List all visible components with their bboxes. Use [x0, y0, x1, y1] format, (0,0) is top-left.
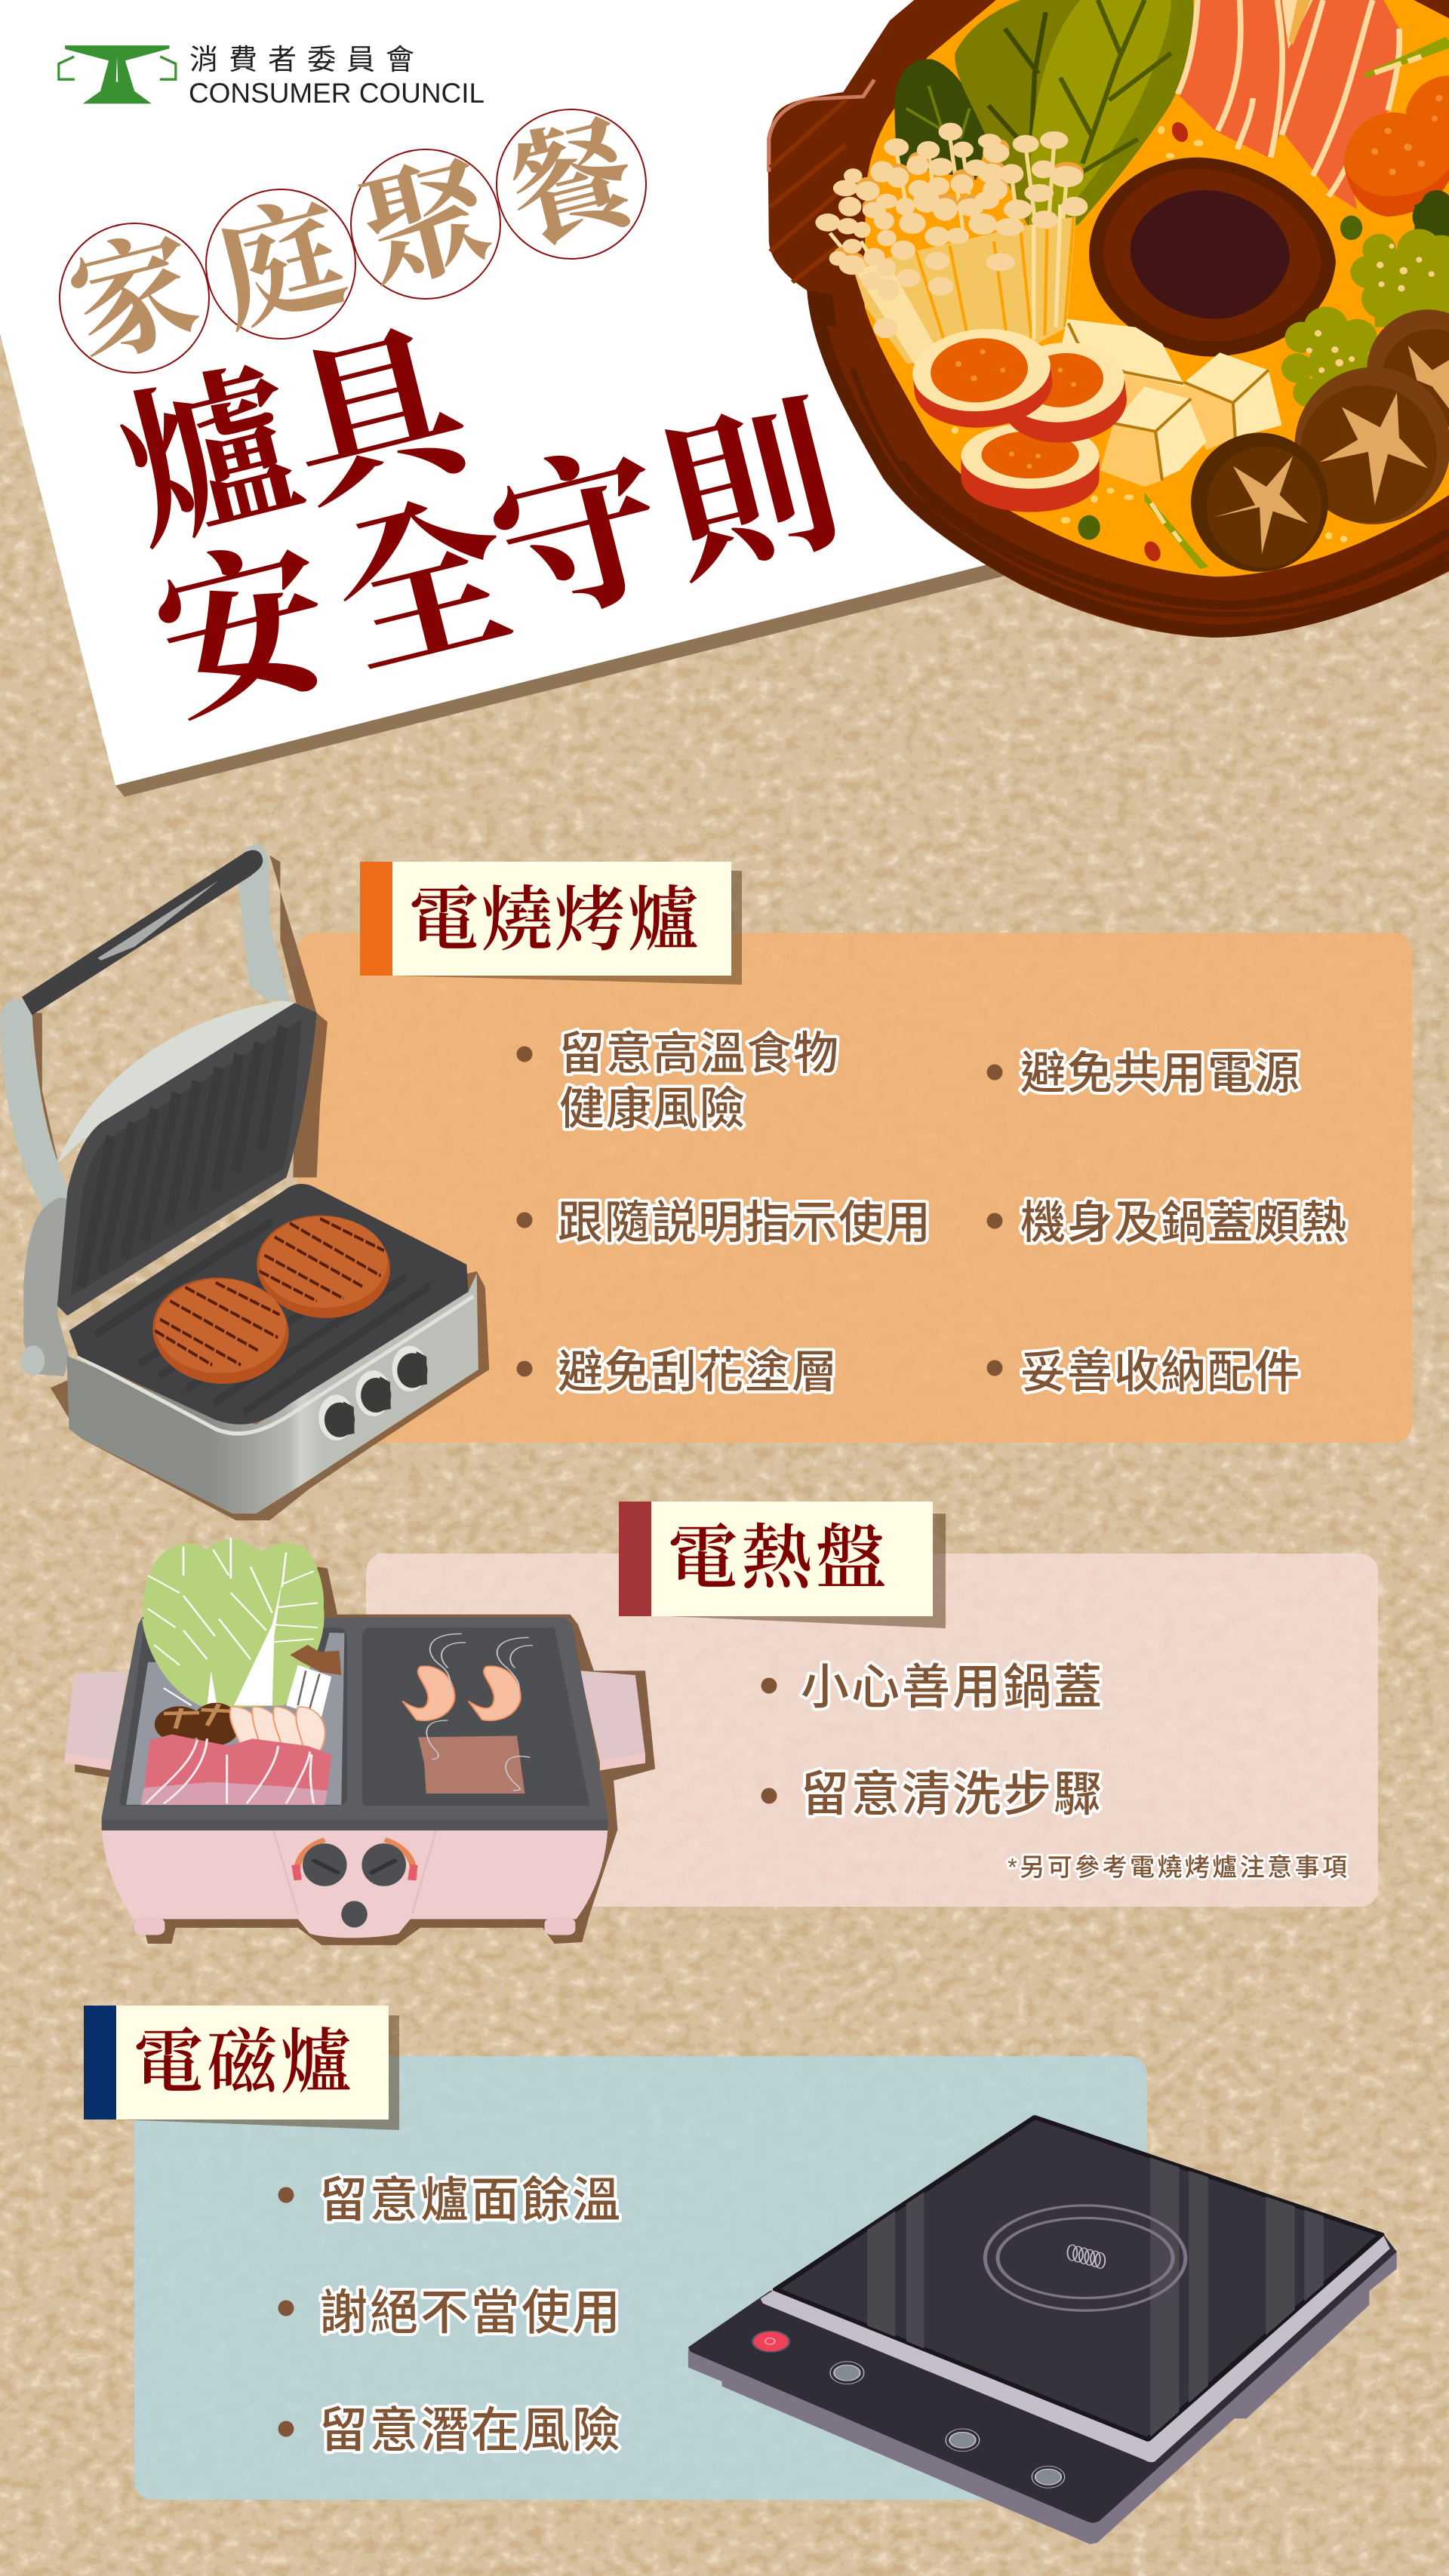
note: refer to grill tips: *另可參考電燒烤爐注意事項: [1008, 1853, 1347, 1881]
grill plate: [69, 1184, 468, 1425]
shiitake in griddle: [155, 1703, 240, 1745]
cooked shrimps: [402, 1666, 521, 1720]
cooker top: [688, 2234, 1397, 2522]
grill lid back: [57, 1000, 297, 1164]
list: electric grill tips: 避免刮花塗層: [558, 1347, 838, 1397]
griddle dark tray: [102, 1618, 608, 1831]
leaf: olive: [955, 0, 1091, 229]
text: logo Chinese name: 消費者委員會: [189, 45, 414, 76]
list: griddle tips: 留意清洗步驟: [801, 1767, 1104, 1821]
list: electric grill tips: 留意高溫食物: [559, 1028, 840, 1079]
dipping sauce bowl: [1089, 158, 1336, 357]
panel: electric griddle background: [366, 1554, 1378, 1907]
steam lines: [426, 1634, 533, 1791]
title: main heading: [106, 301, 857, 745]
illustration: contact grill: [0, 843, 489, 1520]
griddle shadow: [75, 1567, 655, 1945]
control buttons: [834, 2365, 1061, 2485]
panel: electric grill background: [297, 933, 1412, 1443]
title: four sealed characters: [57, 103, 649, 382]
grilled steak: [418, 1735, 525, 1794]
grill handle bar: [22, 850, 263, 1015]
meatballs: [1344, 75, 1449, 217]
grill knobs: [318, 1346, 427, 1440]
list: induction tips: 留意爐面餘溫: [319, 2173, 623, 2227]
label: electric grill heading: 電燒烤爐: [408, 881, 701, 960]
grill body: [66, 1274, 478, 1514]
sliced beef: [141, 1735, 331, 1805]
list: electric grill tips: [516, 1028, 1348, 1397]
leaf: bright green: [1029, 0, 1194, 250]
grill lid plate: [57, 1003, 317, 1316]
glass reflections: [867, 2157, 1324, 2437]
list: electric grill tips: 健康風險: [559, 1084, 746, 1134]
raw shrimps: [230, 1707, 325, 1751]
burner rings: [985, 2206, 1186, 2310]
label: induction heading: 電磁爐: [133, 2024, 355, 2102]
title: main heading: 爐: [106, 347, 318, 572]
title: main heading: 具: [272, 301, 503, 531]
illustration: hot pot: [768, 0, 1449, 638]
list: electric grill tips: 機身及鍋蓋頗熱: [1020, 1197, 1348, 1248]
griddle side handles: [65, 1671, 645, 1770]
icon: green scales: [59, 45, 176, 103]
title: four sealed characters: 餐: [494, 103, 649, 268]
list: induction tips: 留意潛在風險: [319, 2403, 623, 2458]
title: four sealed characters: 家: [57, 217, 212, 382]
grill shadow: [29, 855, 489, 1520]
shiitake mushrooms: [1191, 309, 1449, 572]
burner coil: [1067, 2245, 1105, 2268]
list: electric grill tips: 避免共用電源: [1020, 1048, 1301, 1099]
grill arms: [0, 843, 290, 1376]
broccoli: [1281, 190, 1449, 407]
text: logo English name: CONSUMER COUNCIL: [189, 78, 485, 109]
label: griddle heading: 電熱盤: [667, 1520, 889, 1598]
title: main heading: 全: [318, 475, 529, 699]
cabbage leaves: [142, 1538, 325, 1708]
garnish: beans and broth spots: [952, 37, 1449, 569]
list: induction tips: [278, 2173, 623, 2458]
patties: [151, 1213, 392, 1387]
panel: title paper: [0, 0, 1026, 797]
griddle dials: [296, 1840, 414, 1928]
tofu cubes: [1060, 319, 1281, 487]
fish cake slices: [908, 323, 1131, 512]
title: main heading: 則: [646, 381, 857, 606]
enoki mushrooms: [815, 123, 1088, 364]
cooker side: [688, 2250, 1397, 2544]
illustration: electric griddle: [65, 1538, 655, 1945]
label: induction heading: [84, 2006, 399, 2130]
label: electric grill heading: [360, 862, 742, 985]
title: main heading: 安: [139, 520, 350, 745]
illustration: induction cooker: [688, 2117, 1397, 2544]
enoki stems and mushroom caps: [286, 1645, 341, 1717]
label: griddle heading: [619, 1502, 946, 1628]
list: induction tips: 謝絕不當使用: [319, 2286, 623, 2340]
leaf: dark green: [894, 59, 987, 180]
list: electric grill tips: 跟隨説明指示使用: [558, 1197, 932, 1248]
list: griddle tips: 小心善用鍋蓋: [801, 1660, 1104, 1714]
power button: [752, 2332, 789, 2352]
panel: induction cooker background: [134, 2056, 1147, 2500]
title: main heading: 守: [475, 426, 686, 651]
griddle pink body: [102, 1830, 608, 1938]
list: griddle tips: [761, 1660, 1347, 1881]
cooker glass: [776, 2117, 1381, 2439]
logo: Consumer Council: [59, 45, 485, 109]
cooker silver trim: [761, 2236, 1390, 2462]
title: four sealed characters: 聚: [349, 143, 505, 308]
title: four sealed characters: 庭: [204, 183, 358, 348]
list: electric grill tips: 妥善收納配件: [1020, 1347, 1301, 1397]
pork slices: [1177, 0, 1399, 210]
